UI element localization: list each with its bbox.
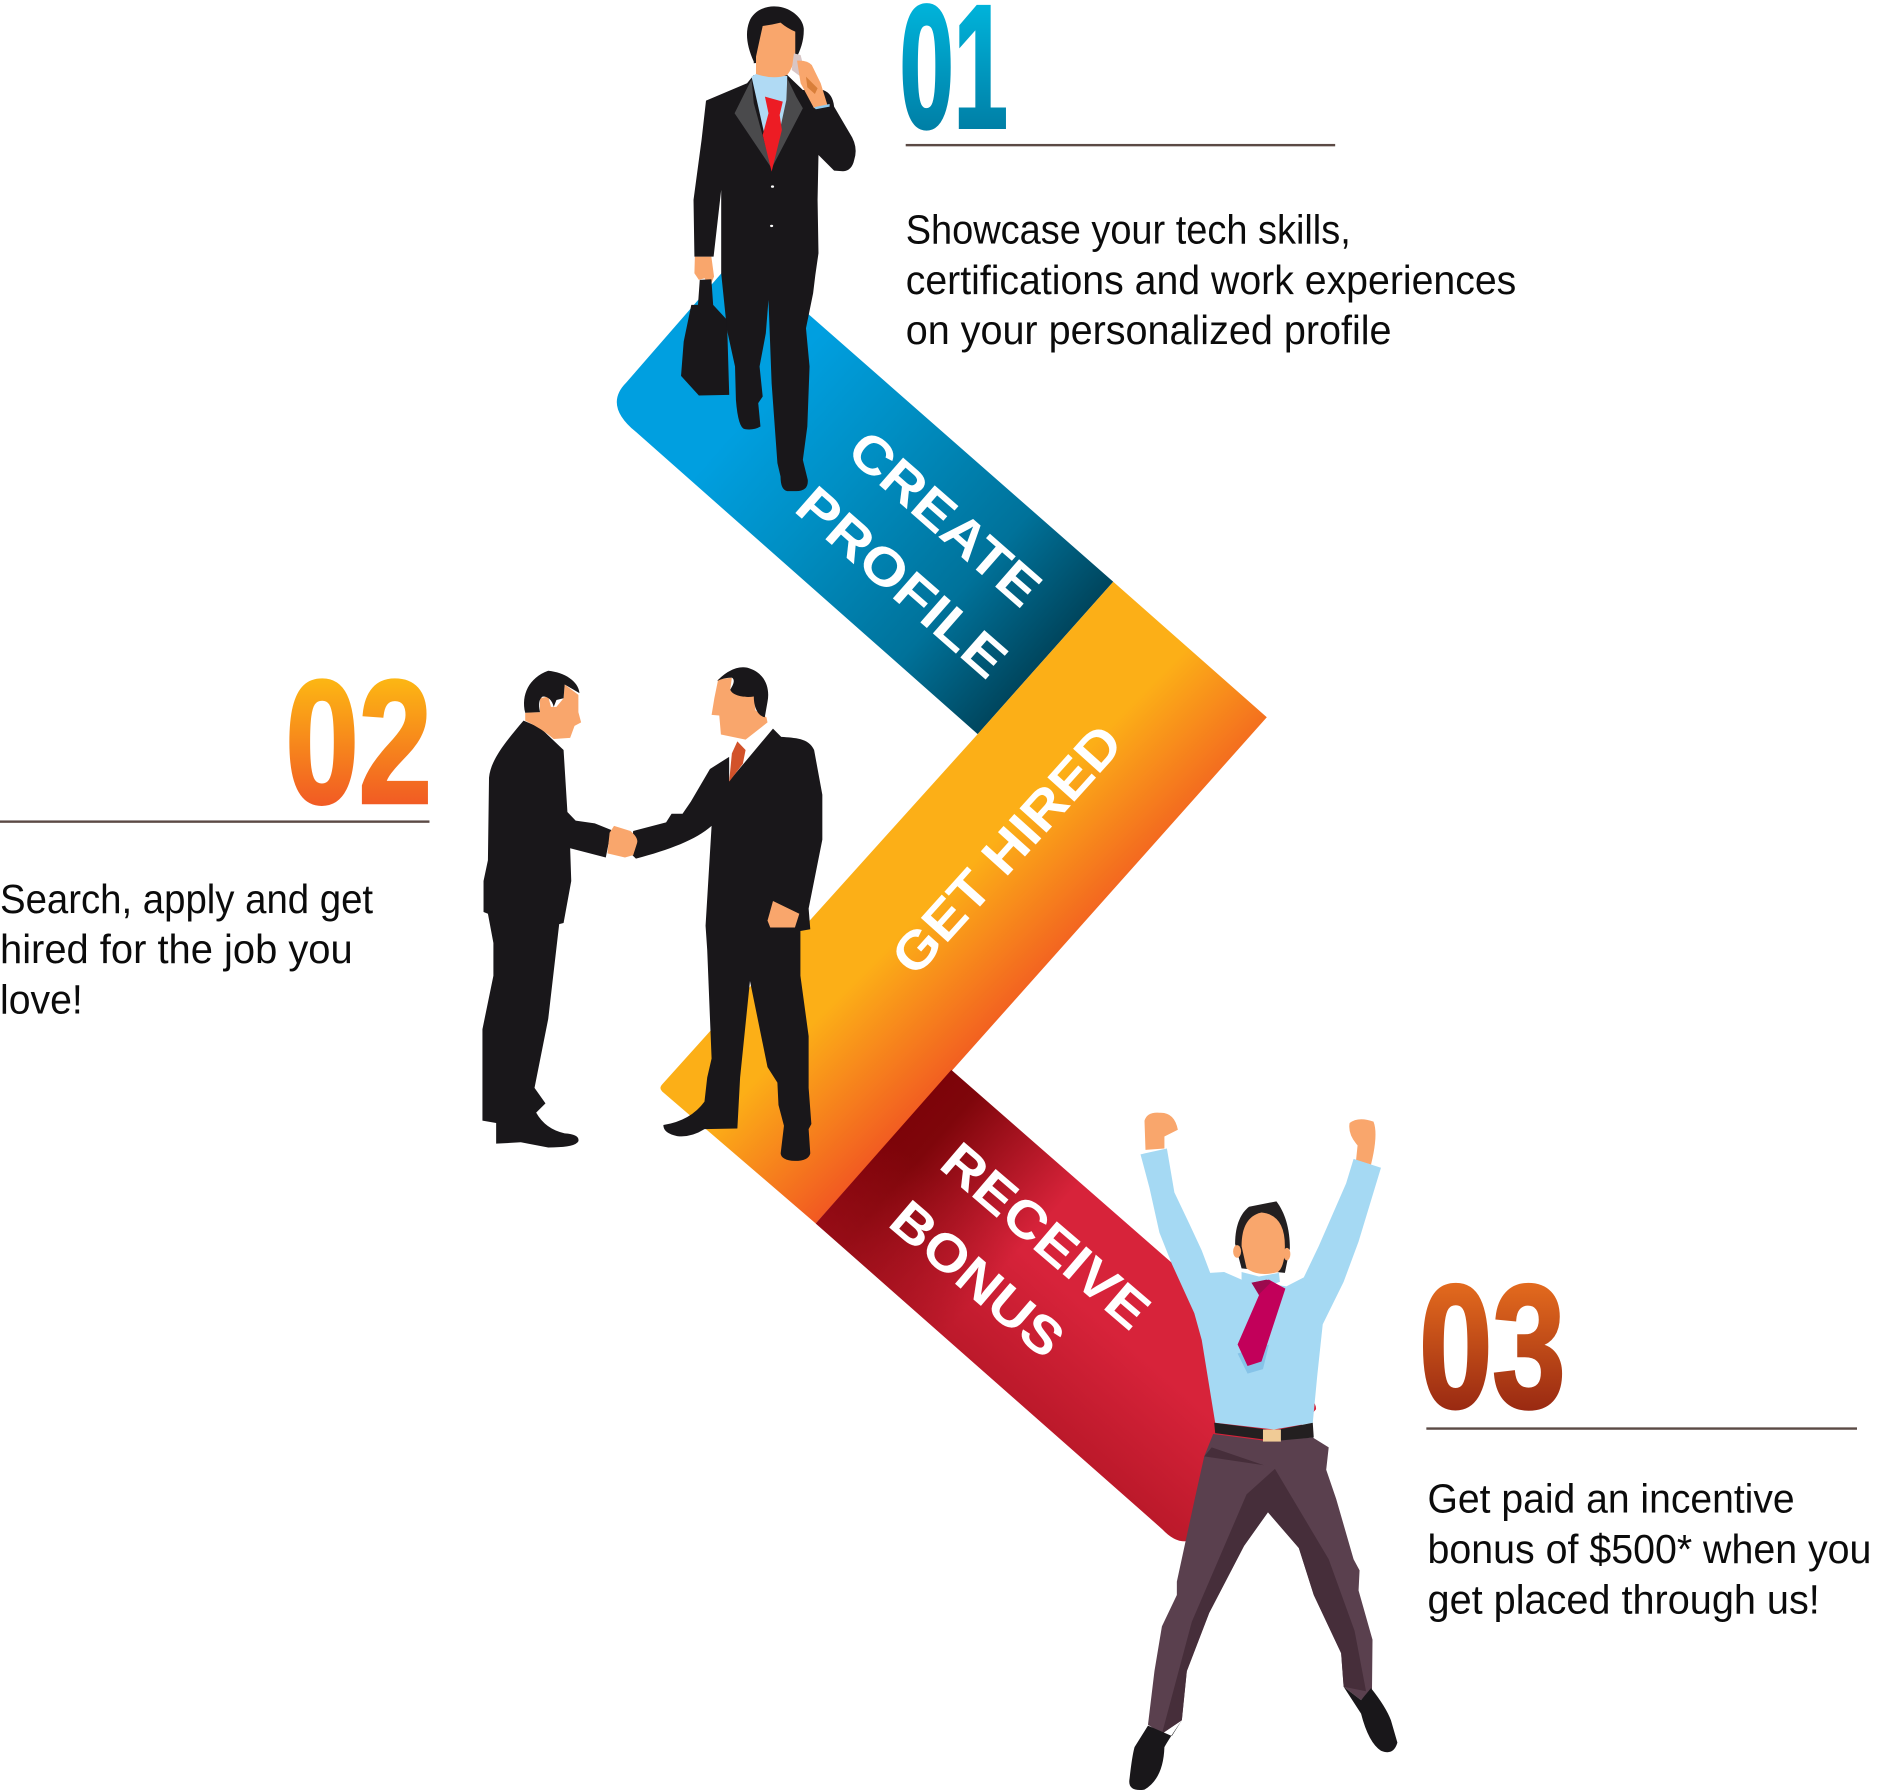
figure: celebrating man with raised fists	[1129, 1113, 1397, 1790]
step 2 rule	[0, 820, 429, 823]
step 2 description: hired for the job you	[0, 926, 353, 972]
label: create profile: PROFILE	[784, 475, 1018, 690]
step 3 description: bonus of $500* when you	[1428, 1526, 1871, 1572]
ribbon: get hired	[660, 582, 1267, 1223]
step 1 description	[906, 206, 1516, 353]
right man	[630, 667, 822, 1161]
step 3 description	[1428, 1476, 1871, 1622]
step 2 description	[0, 876, 374, 1023]
label: receive bonus	[878, 1131, 1161, 1370]
ribbon: create profile	[617, 253, 1113, 734]
label: receive bonus: BONUS	[878, 1189, 1075, 1370]
step 2 description: love!	[0, 977, 83, 1023]
left man	[482, 671, 611, 1147]
label: create profile: CREATE	[837, 419, 1052, 619]
label: create profile	[784, 419, 1052, 690]
step 3 number: 03	[1419, 1249, 1566, 1445]
step 1 description: on your personalized profile	[906, 307, 1392, 353]
figure: businessman on phone with briefcase	[681, 6, 856, 491]
label: get hired: GET HIRED	[880, 713, 1134, 986]
step 3 rule	[1426, 1427, 1857, 1430]
ribbon: receive bonus	[816, 1070, 1316, 1541]
step 2 description: Search, apply and get	[0, 876, 374, 922]
handshake	[607, 826, 637, 858]
step 1 description: Showcase your tech skills,	[906, 206, 1351, 252]
step 2 number: 02	[286, 644, 432, 840]
label: receive bonus: RECEIVE	[930, 1131, 1161, 1341]
figure: two businessmen shaking hands	[482, 667, 822, 1161]
step 1 rule	[906, 144, 1335, 146]
step 3 description: get placed through us!	[1428, 1576, 1820, 1622]
step 3 description: Get paid an incentive	[1428, 1476, 1795, 1522]
step 1 description: certifications and work experiences	[906, 257, 1516, 303]
